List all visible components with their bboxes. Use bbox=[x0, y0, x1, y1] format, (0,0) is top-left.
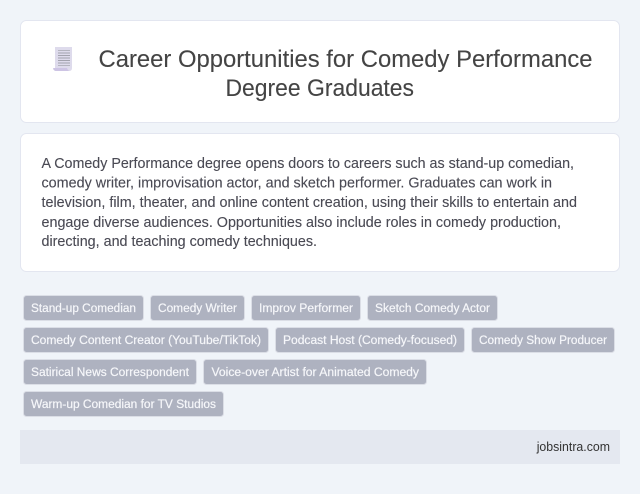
title: Degree Graduates bbox=[226, 75, 414, 102]
tag: Voice-over Artist bbox=[204, 360, 426, 384]
tag: Comedy Show Producer bbox=[472, 328, 614, 352]
tag: Comedy Content Creator: Comedy Content Creator (YouTube/TikTok) bbox=[31, 333, 261, 347]
tag: Comedy Writer bbox=[150, 296, 244, 320]
text block: description: A Comedy Performance degree opens doors to careers such as stand-up comedian, bbox=[42, 156, 574, 172]
tag: Satirical News Correspondent: Satirical News Correspondent bbox=[31, 365, 190, 379]
panel: career tags bbox=[24, 296, 614, 416]
text block: description: engage diverse audiences. Opportunities also include roles in comedy production, bbox=[42, 215, 561, 231]
tag: Stand-up Comedian: Stand-up Comedian bbox=[31, 301, 136, 315]
panel: description bbox=[20, 134, 620, 272]
tag: Voice-over Artist: Voice-over Artist for Animated Comedy bbox=[212, 365, 420, 379]
text block: description: comedy writer, improvisation actor, and sketch performer. Graduates can work in bbox=[42, 176, 552, 192]
tag: Comedy Show Producer: Comedy Show Producer bbox=[479, 333, 607, 347]
tag: Comedy Content Creator bbox=[24, 328, 268, 352]
tag: Warm-up Comedian bbox=[24, 392, 224, 416]
title bbox=[98, 46, 592, 102]
icon: scroll document bbox=[53, 47, 72, 71]
footer: jobsintra.com bbox=[536, 440, 610, 454]
text block: description: directing, and teaching comedy techniques. bbox=[42, 234, 317, 250]
tag: Stand-up Comedian bbox=[24, 296, 144, 320]
tag: Improv Performer bbox=[252, 296, 360, 320]
tag: Podcast Host bbox=[276, 328, 464, 352]
text block: description: television, film, theater, and online content creation, using their skills to entertain and bbox=[42, 195, 577, 211]
tag: Sketch Comedy Actor: Sketch Comedy Actor bbox=[375, 301, 490, 315]
tag: Satirical News Correspondent bbox=[24, 360, 196, 384]
title: Career Opportunities for Comedy Performance bbox=[98, 46, 592, 73]
tag: Podcast Host: Podcast Host (Comedy-focused) bbox=[283, 333, 457, 347]
text block: description bbox=[42, 156, 577, 250]
footer bbox=[20, 430, 620, 464]
tag: Comedy Writer: Comedy Writer bbox=[158, 301, 237, 315]
tag: Sketch Comedy Actor bbox=[368, 296, 498, 320]
tag: Improv Performer: Improv Performer bbox=[259, 301, 353, 315]
panel: header bbox=[20, 20, 620, 122]
tag: Warm-up Comedian: Warm-up Comedian for TV Studios bbox=[31, 397, 216, 411]
